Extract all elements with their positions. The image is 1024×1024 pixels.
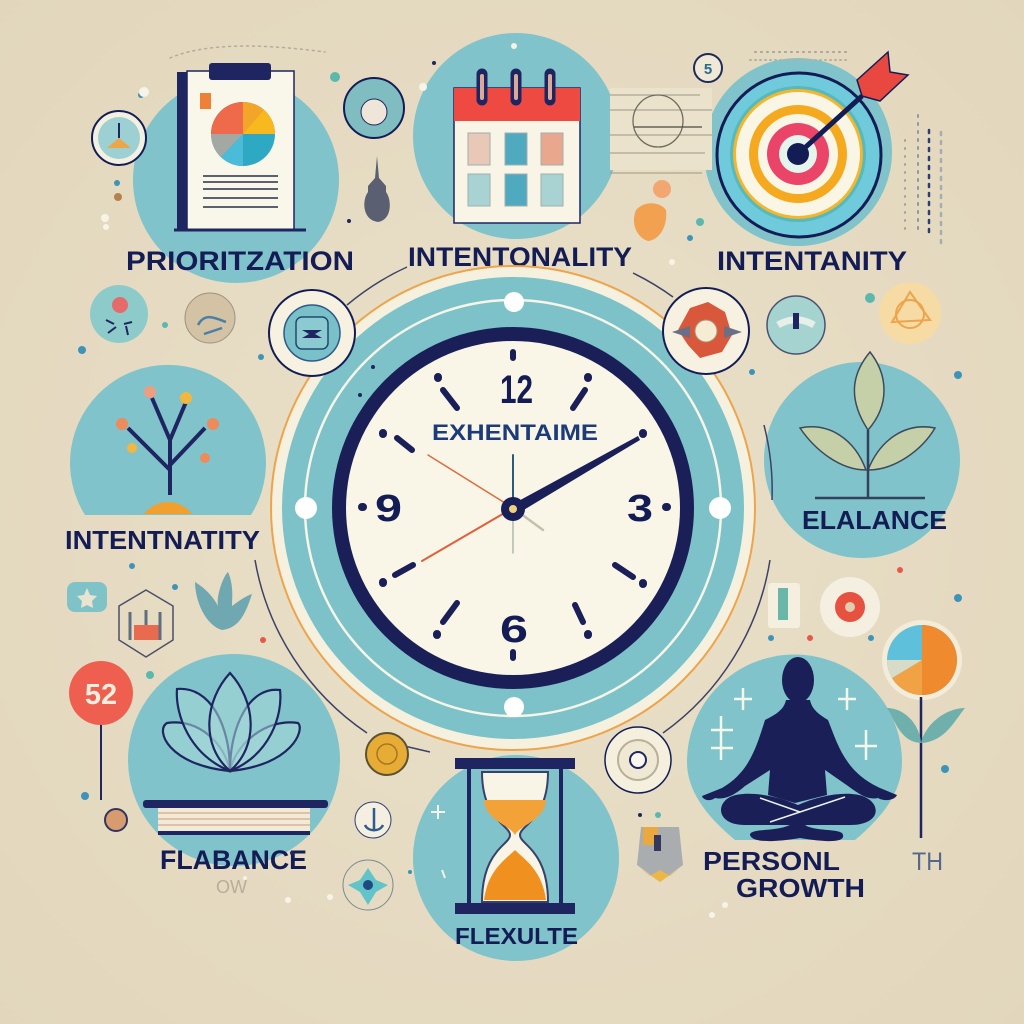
dotted columns xyxy=(170,46,941,245)
clock numerals xyxy=(375,368,653,651)
clock numerals: 9 xyxy=(375,488,402,530)
badge: number 5: 5 xyxy=(704,61,712,78)
icon: pie flower xyxy=(882,620,965,838)
ghost letters th: TH xyxy=(912,848,943,876)
heading: flexulte: FLEXULTE xyxy=(455,923,578,949)
balloon: 52: 52 xyxy=(85,679,117,711)
badge: hourglass clock xyxy=(92,111,146,165)
panel: personal growth xyxy=(687,654,943,903)
icon: target with arrow xyxy=(717,52,908,237)
panel: lotus flabance xyxy=(128,654,340,897)
icon: hourglass xyxy=(455,758,575,914)
balloon: 52 xyxy=(69,661,133,800)
icon: bar chart card xyxy=(768,583,800,628)
icon: meditating figure xyxy=(702,657,897,841)
clock tick marks xyxy=(362,352,667,658)
icon: tree xyxy=(116,386,219,514)
heading: intentanity: INTENTANITY xyxy=(717,246,907,276)
badge: ring xyxy=(605,727,671,793)
heading: intentonality: INTENTONALITY xyxy=(408,242,632,272)
badge: number 5 xyxy=(694,54,722,82)
icon: book xyxy=(143,800,328,835)
panel: tree intentatity xyxy=(65,365,266,555)
confetti dots xyxy=(78,43,962,918)
badge: flame xyxy=(344,78,404,138)
panel: balance xyxy=(764,352,960,558)
clock label: EXHENTAIME xyxy=(432,420,598,445)
panel: target intentanity xyxy=(704,52,908,276)
sparkles xyxy=(711,688,877,760)
icon: flask xyxy=(364,156,390,222)
badge: screen xyxy=(269,290,355,376)
icon: padlock xyxy=(637,827,683,882)
heading: elalance: ELALANCE xyxy=(802,505,947,535)
panel: hourglass flexulte xyxy=(413,755,619,961)
badges: small icons lower left xyxy=(67,572,252,831)
badge: red flower xyxy=(663,288,749,374)
panel: prioritization xyxy=(126,63,354,283)
clock hands xyxy=(422,436,640,561)
badge: red target xyxy=(820,577,880,637)
clock numerals: 12 xyxy=(500,368,533,412)
icon: clipboard report xyxy=(174,63,306,230)
ghost text: OW xyxy=(216,877,247,897)
central clock xyxy=(255,266,772,752)
sketch card xyxy=(610,88,712,173)
clock numerals: 6 xyxy=(500,609,528,651)
heading: flabance: FLABANCE xyxy=(160,845,307,875)
badges: mid row right xyxy=(767,282,941,354)
heading: intentatity: INTENTNATITY xyxy=(65,525,260,555)
badges: mid row left xyxy=(90,285,235,343)
icon: calendar xyxy=(454,74,580,223)
badges: small icons lower centre xyxy=(343,733,408,910)
clock numerals: 3 xyxy=(627,488,653,530)
heading: prioritization: PRIORITZATION xyxy=(126,246,354,276)
panel: calendar intentionality xyxy=(408,33,632,272)
subheading: growth: GROWTH xyxy=(736,873,865,903)
orange blobs xyxy=(634,180,671,241)
icon: lotus xyxy=(163,673,300,771)
heading: personal growth: PERSONL xyxy=(703,846,840,876)
icon: plant xyxy=(800,352,935,498)
